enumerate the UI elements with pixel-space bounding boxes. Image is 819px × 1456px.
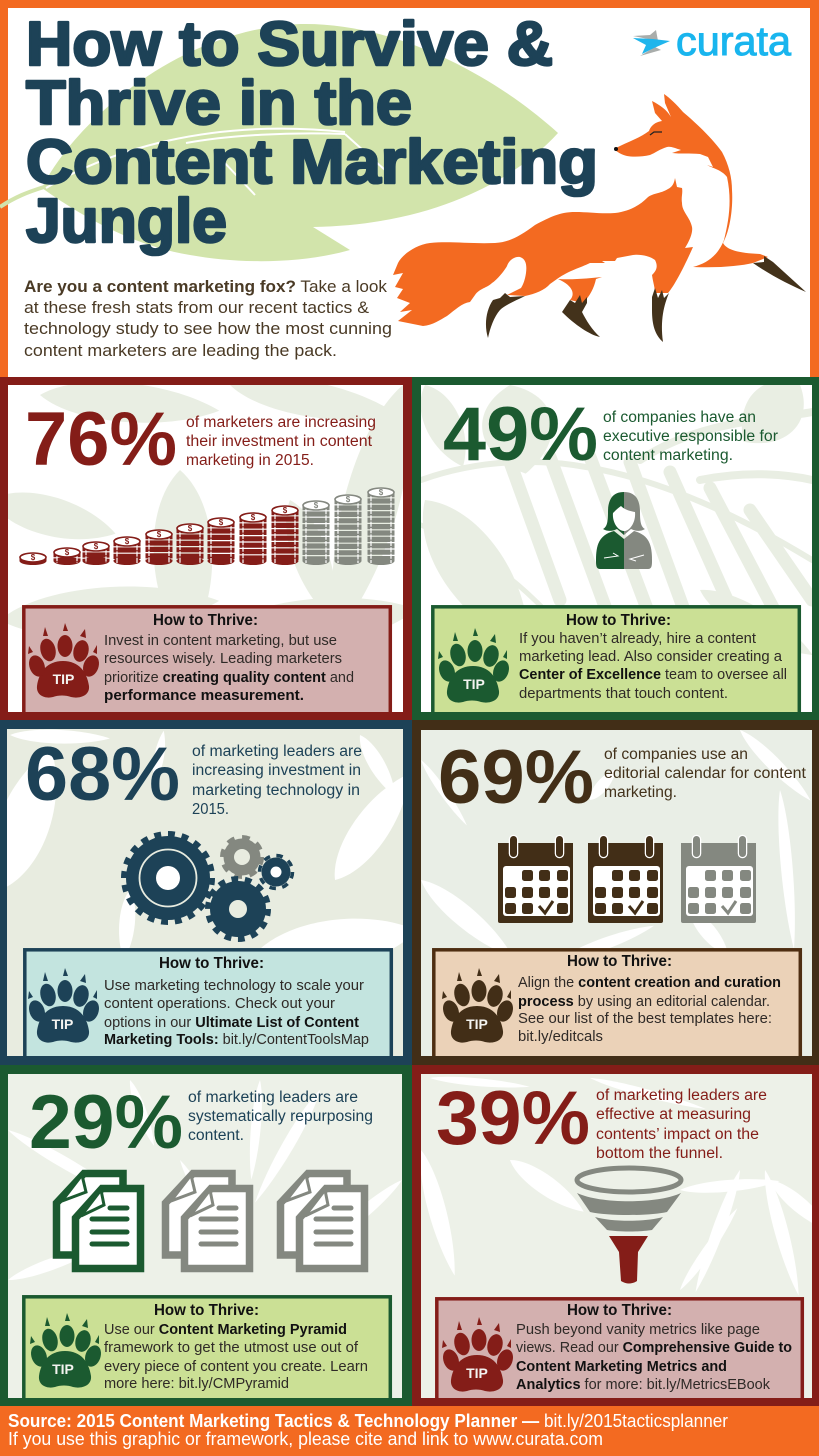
tip box: prioritize creating quality content and bbox=[104, 670, 354, 686]
description: editorial calendar for content bbox=[604, 765, 807, 782]
title bbox=[26, 10, 598, 256]
tip box: How to Thrive: bbox=[159, 955, 264, 972]
tip box: Marketing Tools: bit.ly/ContentToolsMap bbox=[104, 1032, 369, 1048]
panel: 69% companies bbox=[412, 720, 819, 1065]
coin stacks chart: $ bbox=[125, 537, 130, 546]
statistic: 49% bbox=[443, 392, 598, 477]
description bbox=[604, 746, 807, 801]
coin stacks chart: $ bbox=[188, 524, 193, 533]
description: effective at measuring bbox=[596, 1106, 751, 1123]
footer bbox=[0, 1406, 819, 1456]
panel: 76% marketers bbox=[0, 368, 429, 720]
icon: paw tip bbox=[28, 1313, 104, 1388]
tip box: process by using an editorial calendar. bbox=[518, 994, 770, 1010]
logo: curata: curata bbox=[676, 18, 791, 64]
description: bottom the funnel. bbox=[596, 1145, 723, 1162]
tip box bbox=[412, 607, 819, 720]
coin stacks chart bbox=[20, 488, 394, 565]
description: their investment in content bbox=[186, 433, 373, 450]
tip box: more here: bit.ly/CMPyramid bbox=[104, 1376, 289, 1392]
description: of marketing leaders are bbox=[596, 1087, 767, 1104]
footer: Source: 2015 Content Marketing Tactics & Technology Planner — bit.ly/2015tacticsplanner bbox=[8, 1411, 728, 1431]
tip box: How to Thrive: bbox=[567, 953, 672, 970]
tip box: every piece of content you create. Learn bbox=[104, 1359, 368, 1375]
icon: paw tip bbox=[440, 1317, 516, 1392]
description bbox=[188, 1089, 373, 1144]
description: content marketing. bbox=[603, 447, 733, 464]
icon: paw tip bbox=[26, 968, 102, 1043]
icon: paw tip: TIP bbox=[463, 676, 485, 692]
coin stacks chart: $ bbox=[283, 506, 288, 515]
description: content. bbox=[188, 1127, 244, 1144]
description: marketing in 2015. bbox=[186, 452, 314, 469]
intro text bbox=[24, 278, 392, 360]
description: 2015. bbox=[192, 801, 229, 818]
coin stacks chart: $ bbox=[379, 488, 384, 497]
tip box bbox=[0, 1297, 412, 1406]
panel: 68% marketing leaders bbox=[0, 720, 424, 1065]
tip box: Analytics for more: bit.ly/MetricsEBook bbox=[516, 1377, 771, 1393]
description: increasing investment in bbox=[192, 762, 361, 779]
icon: paw tip: TIP bbox=[52, 1361, 74, 1377]
description: of marketing leaders are bbox=[188, 1089, 358, 1106]
description bbox=[596, 1087, 767, 1162]
icon: paw tip: TIP bbox=[466, 1016, 488, 1032]
tip box: resources wisely. Leading marketers bbox=[104, 651, 342, 667]
tip box: Use our Content Marketing Pyramid bbox=[104, 1322, 347, 1338]
coin stacks chart: $ bbox=[157, 530, 162, 539]
icon: paw tip bbox=[26, 623, 102, 698]
icon: paw tip: TIP bbox=[53, 671, 74, 687]
tip box: How to Thrive: bbox=[153, 612, 258, 629]
tip box: bit.ly/editcals bbox=[518, 1029, 603, 1045]
description: of marketing leaders are bbox=[192, 743, 362, 760]
coin stacks chart: $ bbox=[251, 513, 256, 522]
description bbox=[603, 409, 778, 464]
coin stacks chart: $ bbox=[314, 501, 319, 510]
tip box: marketing lead. Also consider creating a bbox=[519, 649, 782, 665]
tip box: If you haven’t already, hire a content bbox=[519, 631, 756, 647]
title: Jungle bbox=[26, 187, 227, 256]
tip box bbox=[412, 950, 819, 1065]
tip box: Use marketing technology to scale your bbox=[104, 978, 364, 994]
description: contents’ impact on the bbox=[596, 1126, 759, 1143]
coin stacks chart: $ bbox=[346, 495, 351, 504]
tip box: performance measurement. bbox=[104, 688, 304, 704]
panel: 49% companies bbox=[399, 366, 819, 720]
tip box: Content Marketing Metrics and bbox=[516, 1359, 727, 1375]
tip box: How to Thrive: bbox=[154, 1302, 259, 1319]
description bbox=[192, 743, 362, 818]
tip box: See our list of the best templates here: bbox=[518, 1011, 772, 1027]
description: marketing technology in bbox=[192, 782, 360, 799]
tip box: options in our Ultimate List of Content bbox=[104, 1015, 359, 1031]
title: Content Marketing bbox=[26, 128, 598, 197]
tip box bbox=[0, 607, 412, 720]
intro text: content marketers are leading the pack. bbox=[24, 342, 337, 360]
tip box bbox=[412, 1299, 819, 1406]
tip box: How to Thrive: bbox=[567, 1302, 672, 1319]
tip box: Push beyond vanity metrics like page bbox=[516, 1322, 760, 1338]
icon: paw tip bbox=[440, 968, 516, 1043]
tip box: Center of Excellence team to oversee all bbox=[519, 667, 787, 683]
tip box: Invest in content marketing, but use bbox=[104, 633, 337, 649]
tip box: departments that touch content. bbox=[519, 686, 728, 702]
coin stacks chart: $ bbox=[219, 518, 224, 527]
icon: paw tip bbox=[436, 628, 512, 703]
intro text: Are you a content marketing fox? Take a look bbox=[24, 278, 388, 296]
title: How to Survive & bbox=[26, 10, 553, 79]
description bbox=[186, 414, 376, 469]
title: Thrive in the bbox=[26, 69, 412, 138]
tip box: views. Read our Comprehensive Guide to bbox=[516, 1340, 792, 1356]
description: marketing. bbox=[604, 784, 677, 801]
tip box: How to Thrive: bbox=[566, 612, 671, 629]
description: systematically repurposing bbox=[188, 1108, 373, 1125]
panel: 39% marketing leaders bbox=[412, 1065, 819, 1406]
coin stacks chart: $ bbox=[65, 548, 70, 557]
icon: paw tip: TIP bbox=[466, 1365, 488, 1381]
intro text: at these fresh stats from our recent tactics & bbox=[24, 299, 369, 317]
panel: 29% marketing leaders bbox=[0, 1065, 412, 1406]
statistic: 29% bbox=[29, 1080, 183, 1165]
description: of marketers are increasing bbox=[186, 414, 376, 431]
description: of companies have an bbox=[603, 409, 756, 426]
tip box bbox=[0, 950, 412, 1065]
icon: funnel bbox=[577, 1168, 681, 1284]
intro text: technology study to see how the most cunning bbox=[24, 320, 392, 338]
statistic: 76% bbox=[25, 397, 177, 482]
icon: gears bbox=[124, 834, 292, 939]
icon: executive woman bbox=[596, 492, 652, 569]
footer: If you use this graphic or framework, please cite and link to www.curata.com bbox=[8, 1429, 603, 1449]
statistic: 68% bbox=[25, 732, 180, 817]
tip box: Align the content creation and curation bbox=[518, 975, 781, 991]
header panel bbox=[0, 0, 819, 378]
coin stacks chart: $ bbox=[31, 553, 36, 562]
statistic: 69% bbox=[438, 735, 594, 820]
fox illustration bbox=[393, 94, 806, 342]
statistic: 39% bbox=[436, 1076, 590, 1161]
icon: documents bbox=[56, 1174, 364, 1268]
coin stacks chart: $ bbox=[94, 542, 99, 551]
icon: paw tip: TIP bbox=[52, 1016, 73, 1032]
icon: calendars bbox=[498, 836, 756, 923]
tip box: framework to get the utmost use out of bbox=[104, 1340, 358, 1356]
description: executive responsible for bbox=[603, 428, 778, 445]
tip box: content operations. Check out your bbox=[104, 996, 335, 1012]
description: of companies use an bbox=[604, 746, 748, 763]
background leaf bbox=[0, 24, 558, 261]
